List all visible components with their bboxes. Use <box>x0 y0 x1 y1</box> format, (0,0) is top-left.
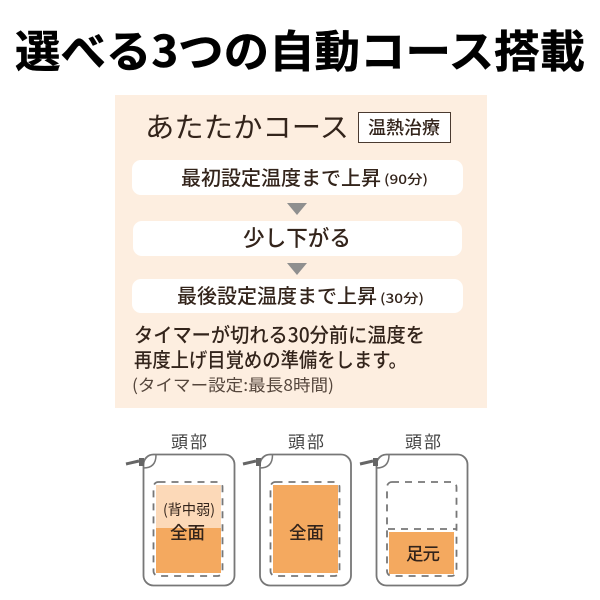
controller cord <box>126 455 156 468</box>
description: タイマーが切れる30分前に温度を <box>134 319 425 348</box>
description: 再度上げ目覚めの準備をします。 <box>134 344 407 373</box>
arrow 2 <box>287 263 307 275</box>
step 3 <box>132 279 463 313</box>
description <box>132 319 425 396</box>
heated area <box>389 532 454 574</box>
head label: 頭部 <box>171 428 207 453</box>
dashed zone <box>154 482 222 576</box>
full label: 全面 <box>170 520 205 545</box>
step 3: (30分) <box>380 288 424 307</box>
head label: 頭部 <box>405 428 441 453</box>
tag: thermal therapy: 温熱治療 <box>368 114 440 140</box>
title: 選べる3つの自動コース搭載 <box>15 16 585 80</box>
full label: 全面 <box>289 520 324 545</box>
device 3: feet <box>360 428 468 586</box>
panel: warm course <box>115 95 487 408</box>
device 2: full <box>243 428 351 586</box>
description: (タイマー設定:最長8時間) <box>132 372 334 396</box>
controller cord <box>360 455 389 468</box>
feet label: 足元 <box>406 541 440 566</box>
course heading: あたたかコース <box>145 106 349 146</box>
dashed divider <box>388 528 456 530</box>
mat outline <box>144 454 234 586</box>
device 1: full with back weak <box>126 428 234 586</box>
head label: 頭部 <box>288 428 324 453</box>
tag: thermal therapy <box>358 112 450 142</box>
step 3: 最後設定温度まで上昇 <box>177 280 377 309</box>
heated area <box>273 485 338 573</box>
arrow 1 <box>287 203 307 215</box>
step 1: (90分) <box>384 169 428 188</box>
step 2: 少し下がる <box>243 221 351 253</box>
strong area <box>156 528 221 573</box>
dashed zone <box>270 482 340 576</box>
step 1 <box>132 160 463 195</box>
step 1: 最初設定温度まで上昇 <box>181 162 381 191</box>
step 2 <box>133 221 462 256</box>
weak area <box>156 485 221 528</box>
controller cord <box>243 455 272 468</box>
mat outline <box>376 454 468 586</box>
weak label: (背中弱) <box>163 499 215 520</box>
mat outline <box>260 454 351 586</box>
dashed zone <box>387 482 456 576</box>
